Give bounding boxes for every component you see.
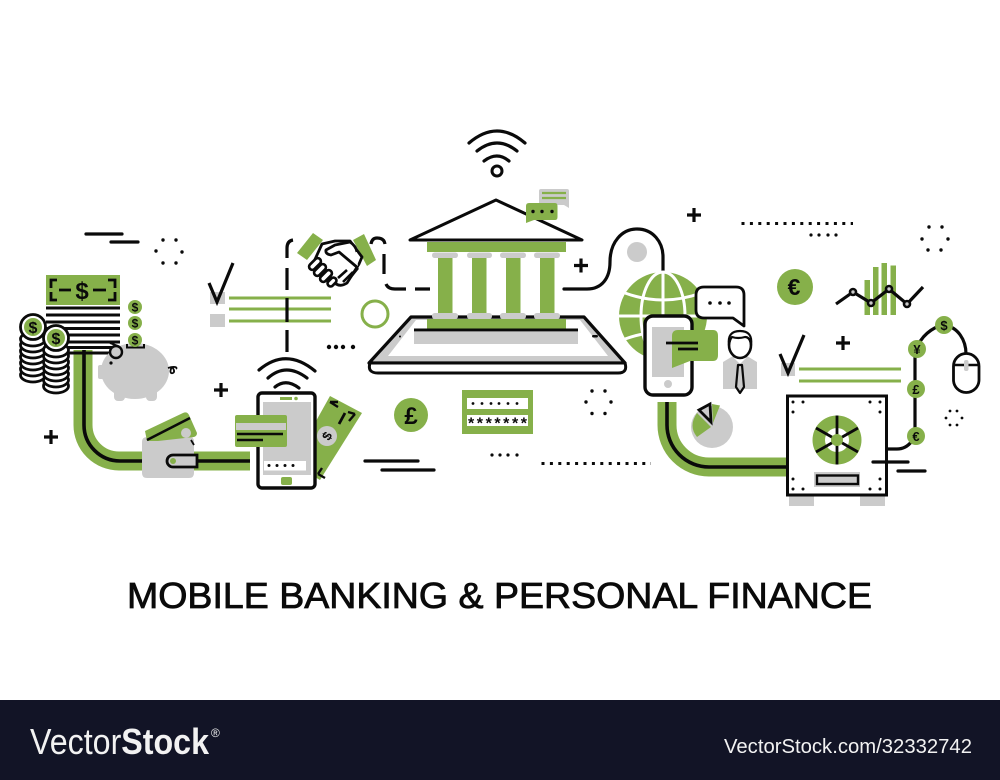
pound coin xyxy=(394,398,428,432)
falling dollar coins xyxy=(128,300,142,348)
checklist right xyxy=(780,335,901,381)
plus sign near phone xyxy=(214,383,228,397)
coin stack left: $ xyxy=(29,320,38,337)
dots and lines bottom centre xyxy=(365,453,651,470)
handshake xyxy=(297,233,376,288)
pound coin: £ xyxy=(404,403,418,430)
footer image id: VectorStock.com/32332742 xyxy=(724,736,972,758)
banknote stack: $ xyxy=(75,278,89,305)
dashed connector left xyxy=(287,240,293,352)
title: MOBILE BANKING & PERSONAL FINANCE xyxy=(127,575,872,616)
plus sign right xyxy=(836,336,850,350)
small dotted circle xyxy=(945,410,963,426)
dotted circle centre xyxy=(584,389,613,415)
footer registered mark: ® xyxy=(211,726,220,740)
businessman xyxy=(723,331,757,393)
footer logo: VectorStock xyxy=(30,721,210,762)
globe xyxy=(619,272,707,360)
falling dollar coins: $ xyxy=(132,300,139,314)
plus sign top right xyxy=(687,208,701,222)
decorative lines top left xyxy=(86,234,138,242)
currency chain to mouse: $ xyxy=(940,318,948,333)
dotted circle top right xyxy=(920,225,950,252)
plus sign by bank xyxy=(574,258,588,272)
lines under chain xyxy=(873,462,925,471)
wallet card xyxy=(145,412,197,441)
phone with chat xyxy=(645,316,718,395)
tablet base xyxy=(369,317,626,373)
bank building xyxy=(410,200,582,328)
falling dollar coins: $ xyxy=(132,334,139,348)
falling dollar coins: $ xyxy=(132,316,139,330)
green ring xyxy=(362,301,388,327)
wifi over phone xyxy=(259,359,315,388)
wifi over bank xyxy=(469,131,525,176)
four dots xyxy=(327,345,355,349)
password box xyxy=(462,390,533,434)
coin stack left xyxy=(20,314,46,382)
green banknote behind phone: $ xyxy=(319,428,336,443)
computer mouse xyxy=(954,354,979,392)
currency chain to mouse xyxy=(887,316,966,449)
checklist left xyxy=(209,263,331,327)
wallet xyxy=(142,412,197,478)
dotted circle top left xyxy=(154,238,184,265)
currency chain to mouse: € xyxy=(912,429,920,444)
dashed connector to bank xyxy=(371,238,430,289)
dotted lines top right xyxy=(742,224,853,237)
footer bar xyxy=(0,700,1000,780)
chat bubbles on roof xyxy=(526,189,569,223)
safe dial xyxy=(812,416,862,464)
green pipe right xyxy=(667,402,787,467)
coin stack right: $ xyxy=(52,331,61,348)
green pipe left xyxy=(83,350,250,461)
euro coin xyxy=(777,269,813,305)
pie chart xyxy=(691,404,733,448)
safe xyxy=(788,396,886,506)
speech bubble xyxy=(696,287,744,326)
coin stack right xyxy=(44,326,68,393)
banknote stack xyxy=(46,275,120,353)
euro coin: € xyxy=(788,274,801,300)
green banknote behind phone xyxy=(292,396,362,480)
credit card xyxy=(235,415,287,447)
phone left xyxy=(258,393,315,488)
piggy bank xyxy=(98,343,177,401)
currency chain to mouse: £ xyxy=(912,382,920,397)
currency chain to mouse: ¥ xyxy=(913,342,921,357)
bar and line chart xyxy=(836,263,923,315)
plus sign left xyxy=(44,430,58,444)
password box: ******* xyxy=(468,416,528,432)
curved connector to globe xyxy=(564,229,663,289)
